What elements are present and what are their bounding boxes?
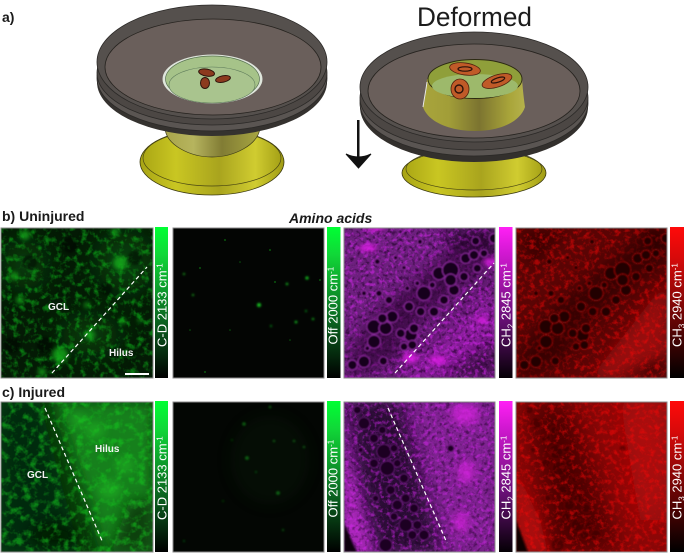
colour bar: off 2000 injured: Off 2000 cm [326,447,340,518]
colour bar: CH3 2940 uninjured: -1 [670,263,680,270]
title: Deformed: Deformed [417,2,532,32]
colour bar: off 2000 injured [326,401,340,552]
colour bar: CH2 2845 uninjured: CH [498,328,514,347]
panel: injured CH2 2845 [344,402,495,552]
panel: uninjured CH2 2845 [344,225,499,378]
colour bar: CH2 2845 uninjured: 2 [506,323,516,328]
colour bar: off 2000 uninjured: Off 2000 cm [326,274,340,344]
panel: injured CH3 2940 [516,402,667,552]
colour bar: C-D 2133 injured [154,401,170,552]
colour bar: CH2 2845 uninjured [498,227,516,378]
colour bar: C-D 2133 uninjured: -1 [156,263,164,270]
arrow: downward [346,120,371,168]
colour bar: C-D 2133 injured: C-D 2133 cm [154,443,170,520]
colour bar: off 2000 uninjured: -1 [326,266,336,274]
colour bar: CH2 2845 injured: 2 [506,496,516,501]
heading: Amino acids: Amino acids [288,210,372,226]
colour bar: CH3 2940 uninjured: 2940 cm [670,270,684,324]
raised dome with tissue [423,60,525,131]
heading: c) Injured: c) Injured [2,384,65,400]
colour bar: off 2000 injured: -1 [326,439,336,447]
yellow base [402,148,546,197]
label a: a) [2,9,14,25]
central well with tissue [162,54,262,104]
panel: uninjured CH3 2940 [516,228,671,378]
injured C-D boundary and labels: Hilus [95,444,120,455]
colour bar: CH2 2845 injured [498,401,516,552]
diagram: undeformed stretcher [97,5,327,195]
CH2 boundary [395,263,494,373]
diagram: deformed stretcher [360,32,588,197]
colour bar: CH2 2845 injured: 2845 cm [498,443,514,496]
colour bar: CH2 2845 injured: CH [498,501,514,520]
panel: uninjured C-D 2133 [1,228,153,378]
panel: injured C-D 2133 [1,402,153,552]
dish [97,5,327,136]
colour bar: CH2 2845 uninjured: 2845 cm [498,270,514,324]
colour bar: CH2 2845 injured: -1 [500,435,508,443]
heading: b) Uninjured: b) Uninjured [2,208,84,224]
colour bar: off 2000 uninjured [326,227,340,378]
uninjured C-D boundary and labels: Hilus [109,348,134,359]
colour bar: C-D 2133 injured: -1 [156,436,164,443]
colour bar: CH3 2940 injured: -1 [670,435,680,443]
panel frames [1,228,667,552]
colour bar: C-D 2133 uninjured: C-D 2133 cm [154,270,170,347]
colour bar: CH3 2940 uninjured: CH [670,328,684,347]
colour bar: CH2 2845 uninjured: -1 [500,263,508,270]
injured C-D boundary and labels [27,408,120,543]
colour bar: CH3 2940 injured: 2940 cm [670,443,684,496]
injured C-D boundary and labels: GCL [27,470,48,481]
colour bar: C-D 2133 uninjured [154,227,170,378]
yellow base [140,128,284,195]
panel: injured off-resonance [173,402,324,552]
dish [360,32,588,162]
CH2 boundary injured [388,408,447,543]
colour bar: CH3 2940 injured: CH [670,501,684,520]
uninjured C-D boundary and labels: GCL [48,302,69,313]
colour bar: CH3 2940 injured [670,401,685,552]
panel: uninjured off-resonance [173,228,324,378]
uninjured C-D boundary and labels [48,267,149,375]
colour bar: CH3 2940 uninjured [670,227,685,378]
